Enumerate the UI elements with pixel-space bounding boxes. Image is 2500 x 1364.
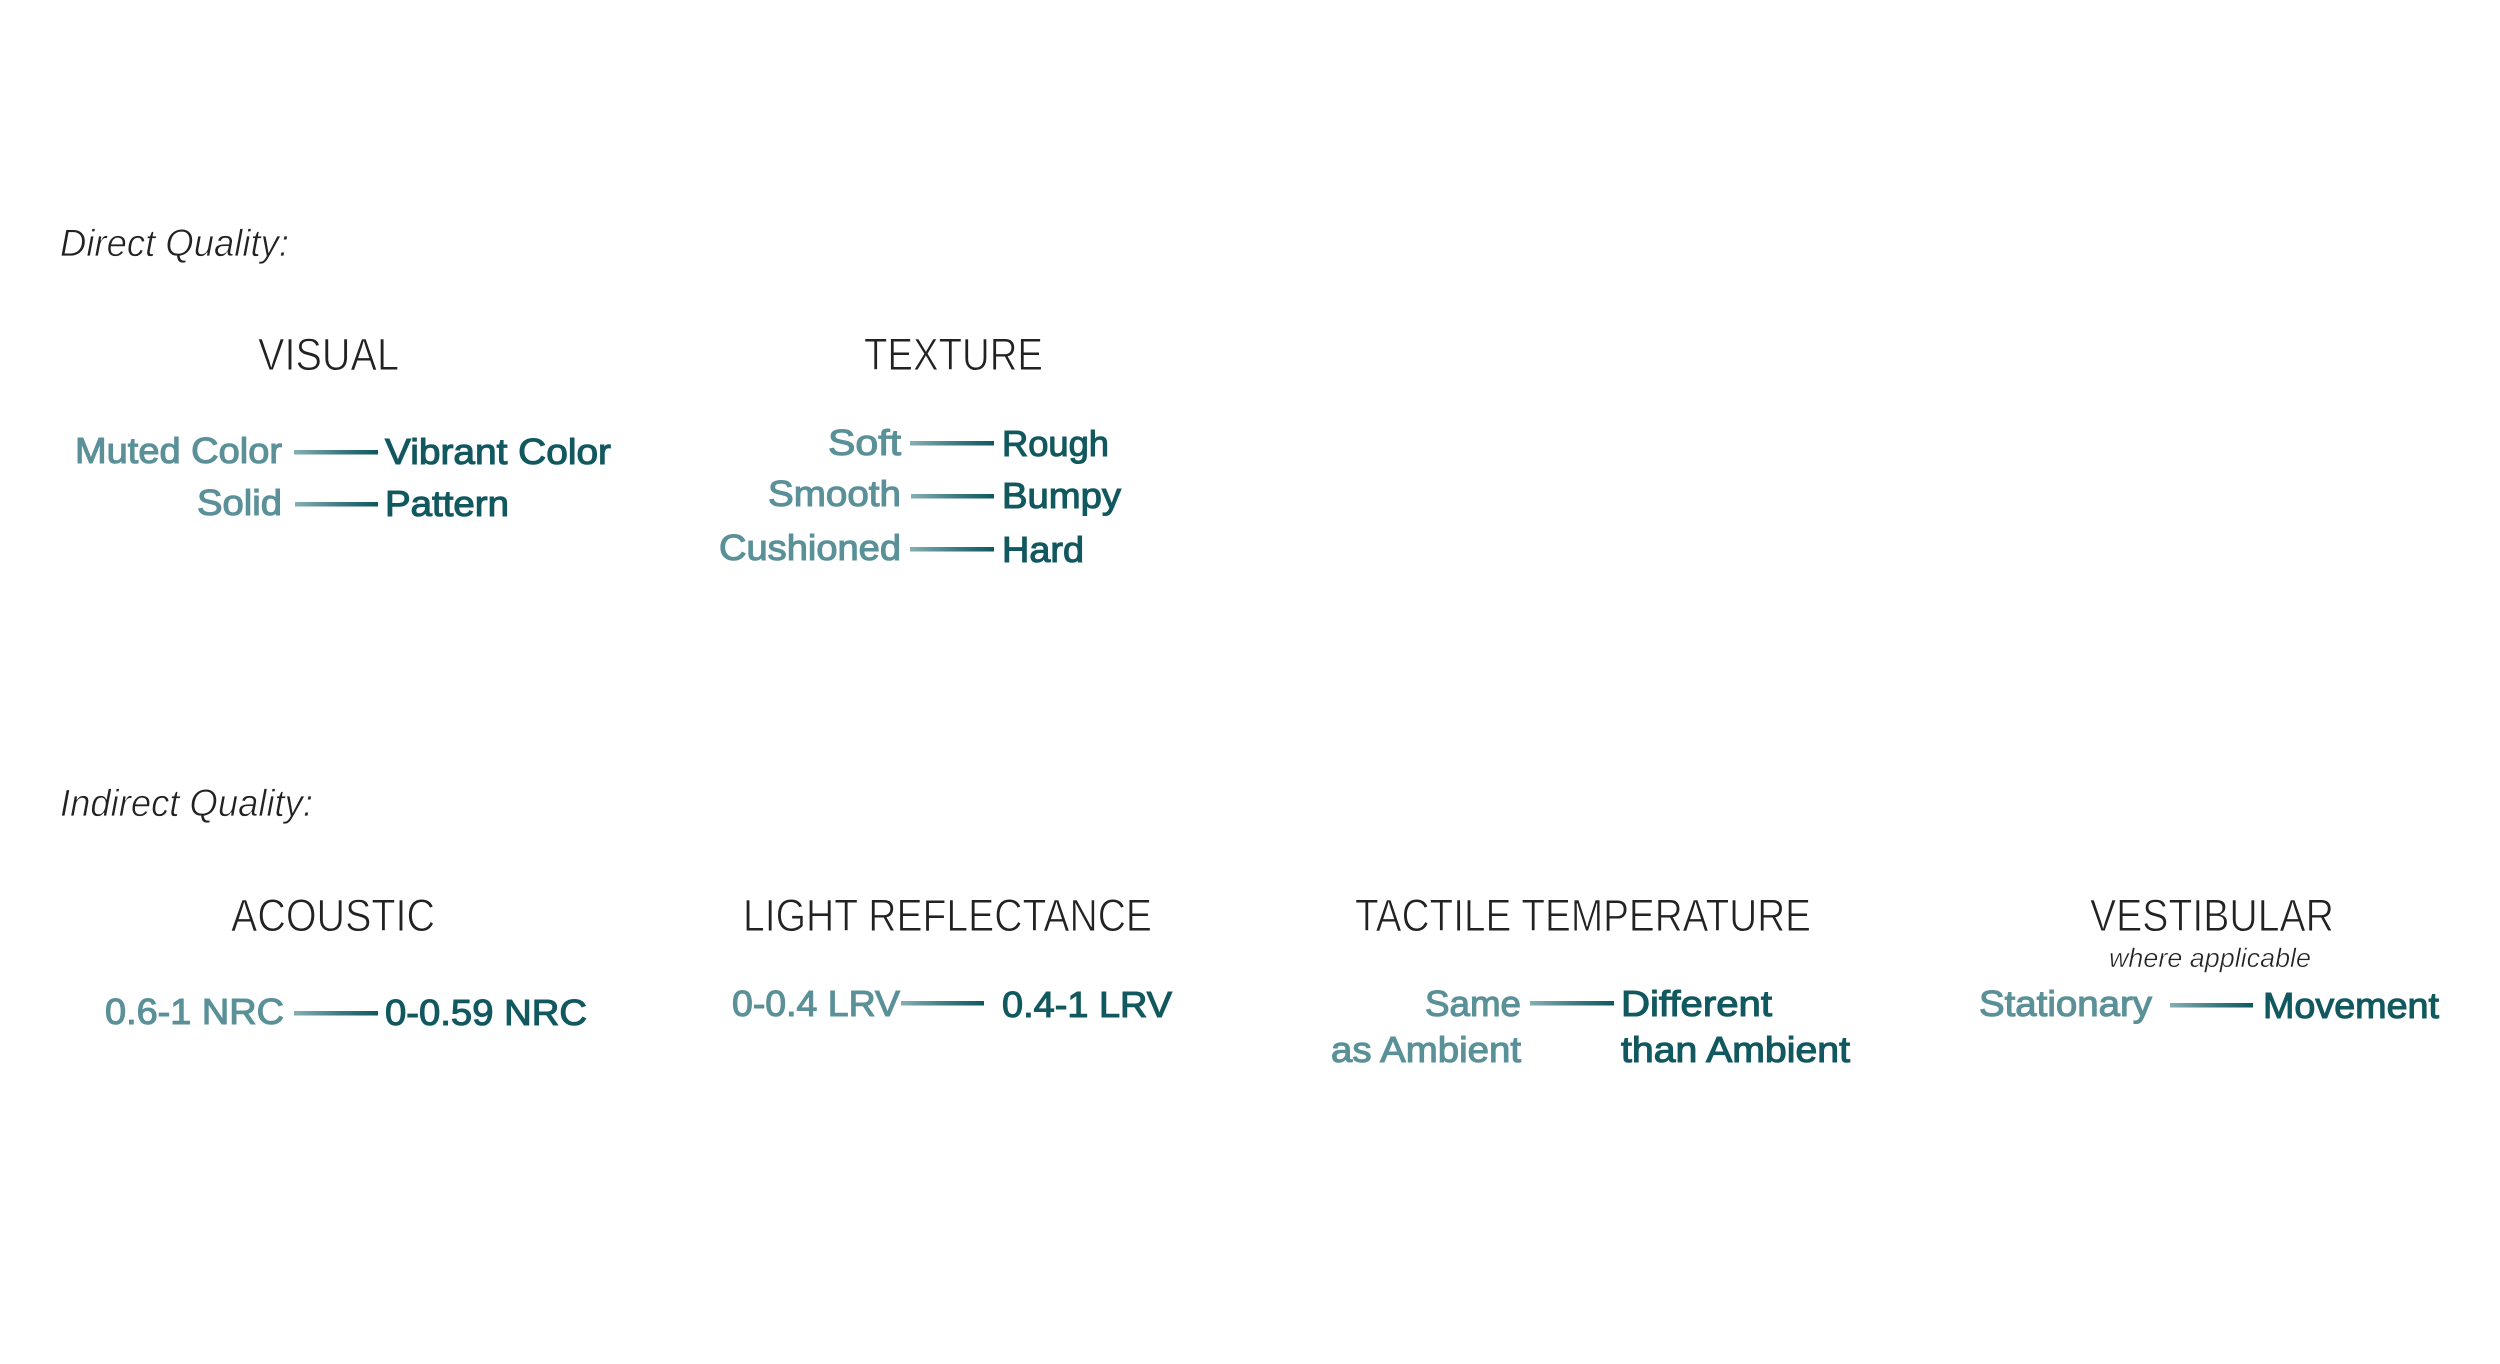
scale: stationary to movement: Movement	[2263, 985, 2439, 1026]
panel: texture	[719, 329, 1121, 570]
scale: LRV: 0-0.4 LRV	[732, 983, 900, 1024]
scale: NRC: 0.6-1 NRC	[105, 991, 284, 1032]
scale: soft to rough	[828, 422, 1109, 464]
heading: texture: TEXTURE	[864, 329, 1043, 380]
scale: stationary to movement	[1979, 983, 2439, 1026]
scale: same to different: than Ambient	[1621, 1029, 1850, 1070]
scale: same to different	[1331, 983, 1850, 1070]
scale: LRV: 0.4-1 LRV	[1002, 984, 1172, 1025]
scale: muted to vibrant color: Muted Color	[75, 430, 282, 471]
heading: light reflectance: LIGHT REFLECTANCE	[743, 890, 1152, 941]
scale: smooth to bumpy: Smooth	[768, 473, 901, 514]
scale: NRC	[105, 991, 587, 1033]
heading: Indirect Quality: Indirect Quality:	[60, 783, 313, 825]
scale: smooth to bumpy: Bumpy	[1002, 475, 1121, 516]
scale: solid to pattern: Solid	[197, 482, 282, 523]
scale: muted to vibrant color: Vibrant Color	[385, 431, 611, 472]
panel: visual	[75, 329, 611, 524]
scale: stationary to movement: Stationary	[1979, 983, 2152, 1024]
scale: muted to vibrant color	[75, 430, 611, 472]
heading: acoustic: ACOUSTIC	[231, 890, 435, 941]
scale: same to different: Same	[1425, 983, 1521, 1024]
panel: vestibular	[1979, 890, 2439, 1026]
heading: vestibular: VESTIBULAR	[2090, 890, 2334, 941]
scale: cushioned to hard	[719, 527, 1084, 570]
scale: solid to pattern: Pattern	[385, 483, 509, 524]
panel: light reflectance	[732, 890, 1172, 1025]
scale: solid to pattern	[197, 482, 509, 524]
scale: NRC: 0-0.59 NRC	[385, 992, 587, 1033]
scale: LRV	[732, 983, 1172, 1025]
note: where applicable: where applicable	[2109, 943, 2311, 973]
heading: Direct Quality: Direct Quality:	[60, 223, 289, 265]
scale: smooth to bumpy	[768, 473, 1121, 516]
scale: soft to rough: Soft	[828, 422, 901, 463]
scale: same to different: Different	[1621, 983, 1772, 1024]
scale: cushioned to hard: Hard	[1002, 529, 1084, 570]
panel: tactile temperature	[1331, 890, 1850, 1070]
panel: acoustic	[105, 890, 587, 1033]
scale: same to different: as Ambient	[1331, 1029, 1521, 1070]
scale: cushioned to hard: Cushioned	[719, 527, 901, 568]
heading: visual: VISUAL	[258, 329, 399, 380]
heading: tactile temperature: TACTILE TEMPERATURE	[1355, 890, 1811, 941]
scale: soft to rough: Rough	[1002, 423, 1109, 464]
